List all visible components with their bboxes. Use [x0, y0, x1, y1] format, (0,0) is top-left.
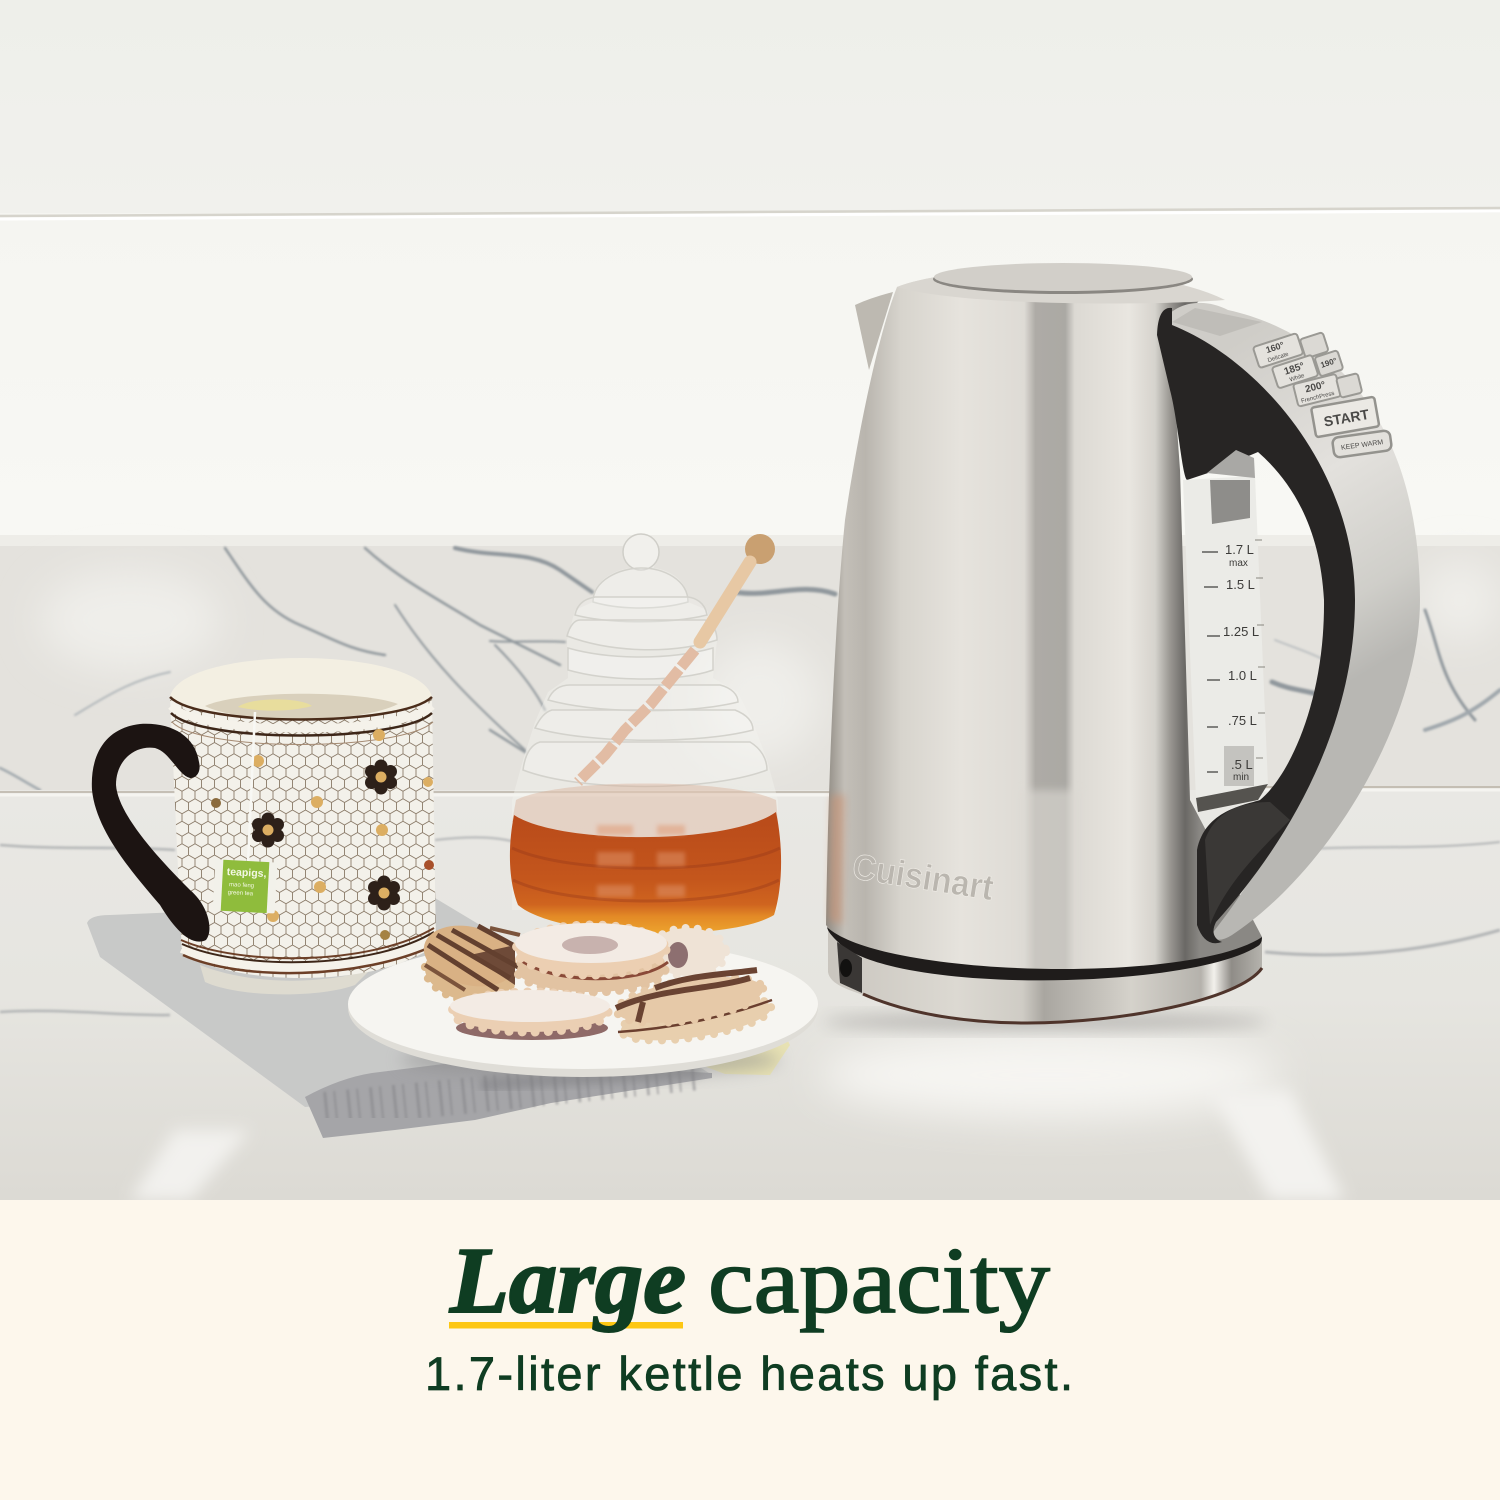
caption	[425, 1229, 1073, 1400]
window min block	[1224, 746, 1254, 786]
plate	[348, 916, 818, 1078]
heading: capacity	[708, 1229, 1050, 1333]
control buttons: KEEP WARM	[1341, 439, 1384, 452]
water level scale	[1202, 540, 1265, 783]
tea bag tag: teapigs,	[226, 866, 267, 880]
power connector	[837, 942, 862, 993]
cookie back right	[650, 928, 726, 976]
marble backsplash	[0, 535, 1500, 791]
window top metal fitting	[1210, 480, 1250, 524]
mug top bands	[170, 697, 433, 744]
black grip	[1157, 308, 1355, 943]
honey highlights	[597, 825, 685, 897]
mug handle	[92, 724, 209, 942]
kettle	[823, 263, 1420, 1032]
tea bag tag	[213, 859, 277, 914]
honey meniscus	[512, 784, 778, 839]
marble countertop	[0, 787, 1500, 1200]
brand wordmark: Cuisinart	[850, 845, 996, 908]
glass tiers	[523, 568, 767, 786]
cream caption panel background	[0, 1200, 1500, 1500]
control buttons: Delicate	[1267, 351, 1290, 364]
mug bottom bands	[181, 928, 435, 973]
cookie front dusted	[450, 990, 610, 1040]
control buttons	[1253, 332, 1392, 458]
control buttons: 200°	[1304, 380, 1327, 395]
water level scale: min	[1233, 772, 1249, 783]
mug body with honeycomb tile pattern	[170, 697, 436, 978]
window bottom shadow	[1196, 784, 1268, 812]
dipper refracted through glass	[578, 650, 695, 782]
mug rim and tea	[170, 658, 432, 720]
honey	[510, 812, 781, 933]
water level scale: 1.7 L	[1225, 542, 1254, 557]
water level scale: 1.25 L	[1223, 624, 1259, 639]
water level scale: max	[1229, 558, 1248, 569]
base black ring	[827, 927, 1262, 980]
kettle contact shadow	[823, 1012, 1267, 1032]
honey dipper knob	[745, 534, 775, 564]
mug flower tiles	[252, 760, 400, 910]
cookie chocolate right	[614, 969, 774, 1049]
honey jar	[510, 534, 781, 933]
heading highlight underline	[449, 1322, 683, 1328]
mug foot	[200, 965, 370, 994]
cookie chocolate left	[417, 916, 523, 1011]
water level scale: .75 L	[1228, 713, 1257, 728]
water level scale: 1.5 L	[1226, 577, 1255, 592]
plate dish	[348, 939, 818, 1069]
subheading: 1.7-liter kettle heats up fast.	[425, 1347, 1073, 1400]
mug gold tiles	[211, 729, 434, 940]
control buttons: 160°	[1265, 340, 1286, 355]
kitchen towel	[87, 898, 712, 1138]
control buttons: White	[1289, 373, 1306, 383]
soft light over lower stripe	[1020, 790, 1080, 975]
metal cone above window	[1207, 450, 1255, 478]
control buttons: FrenchPress	[1301, 391, 1335, 405]
grip lower pad	[1205, 802, 1290, 925]
handle top cap	[1172, 308, 1262, 336]
kettle base	[828, 930, 1262, 1023]
tea bag string	[248, 712, 255, 862]
control buttons: 185°	[1283, 361, 1306, 378]
tea wrapper	[693, 1025, 790, 1075]
silver handle	[1160, 303, 1420, 940]
honey ridges	[512, 848, 780, 901]
control buttons: START	[1322, 406, 1371, 430]
plate dish underside	[348, 939, 818, 1077]
honey dipper stick	[700, 562, 750, 642]
kettle body	[826, 269, 1262, 977]
water level scale: 1.0 L	[1228, 668, 1257, 683]
kettle lid	[897, 263, 1225, 304]
water window	[1183, 476, 1268, 800]
kettle spout	[855, 292, 893, 370]
control buttons: 190°	[1319, 356, 1338, 370]
plate shadow	[400, 1042, 780, 1078]
wall background	[0, 0, 1500, 538]
tea bag tag: green tea	[228, 890, 254, 897]
glass knob	[623, 534, 659, 570]
honey reflection on kettle	[829, 795, 845, 925]
cookie center dusted	[515, 923, 668, 992]
heading: Large	[449, 1229, 686, 1333]
mug	[92, 658, 436, 994]
glass jar silhouette	[512, 534, 778, 910]
water level scale: .5 L	[1231, 757, 1253, 772]
tea bag tag: mao feng	[229, 882, 254, 889]
base dark lower edge	[863, 968, 1262, 1023]
